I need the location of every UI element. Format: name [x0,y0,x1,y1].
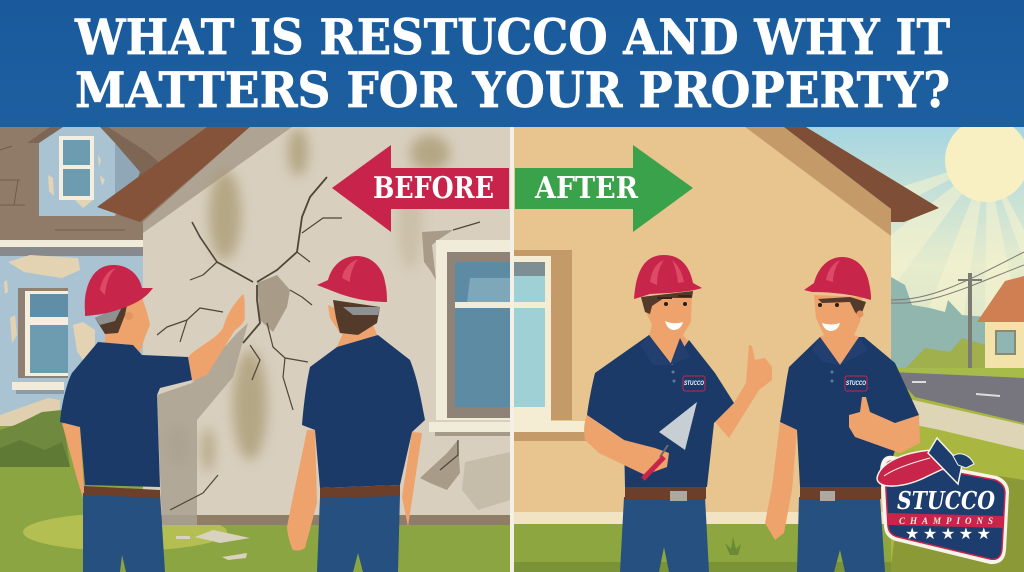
foundation stripe [143,515,512,525]
trowel and swoosh [877,438,974,486]
sun rays [891,160,1024,340]
wall cracks [157,177,480,510]
damaged patches [257,230,510,510]
shirt logo [683,376,705,391]
wordmark CHAMPIONS: CHAMPIONS [899,516,993,526]
upper roof of old house [0,127,300,241]
debris on ground [176,530,250,560]
hard hat [85,265,153,316]
five stars: ★★★★★ [905,524,991,543]
panel: before scene [0,127,512,572]
peeling blue wall [0,255,143,426]
title: WHAT IS RESTUCCO AND WHY IT [74,8,950,66]
worker: thumbs up [765,257,920,572]
arrow: before: BEFORE [373,171,494,206]
new roof [784,127,939,222]
arrow: before [332,145,509,232]
distant hills [891,277,1024,372]
header banner [0,0,1024,127]
center divider [510,127,514,572]
worker: pointing at crack [60,265,245,572]
worker shadow [157,323,248,525]
neighbor house [977,276,1024,368]
wordmark STUCCO: STUCCO [897,486,995,515]
trowel [643,402,697,479]
shirt logo: STUCCO [684,381,704,387]
dormer with window [27,127,162,216]
cracked stucco wall [143,127,512,525]
cracked wall window [429,240,510,436]
panel: after scene [514,118,1024,572]
shirt logo: STUCCO [846,381,866,387]
sky [780,127,1024,377]
water stains [168,128,450,472]
logo: Stucco Champions [877,438,1009,564]
roof trim and band [0,240,143,256]
pointing arm [188,294,245,381]
title [74,8,950,119]
arrow: after [515,145,693,232]
title: MATTERS FOR YOUR PROPERTY? [75,61,950,119]
neck and face [105,295,150,353]
power pole and wires [891,252,1024,372]
red band [888,513,1004,528]
shrub [0,410,70,467]
worker: looking at wall [287,256,425,572]
restored window [514,250,586,441]
arrow: after: AFTER [534,171,639,206]
sun [945,118,1024,202]
eave of old roof [97,127,250,222]
shirt logo [845,376,867,391]
old house window [12,288,68,394]
navy shirt [60,342,192,487]
restored stucco wall [514,127,891,512]
worker: with trowel [584,255,772,572]
base trim and lawn [514,512,891,572]
lawn highlight [23,513,227,551]
street [885,368,1024,572]
